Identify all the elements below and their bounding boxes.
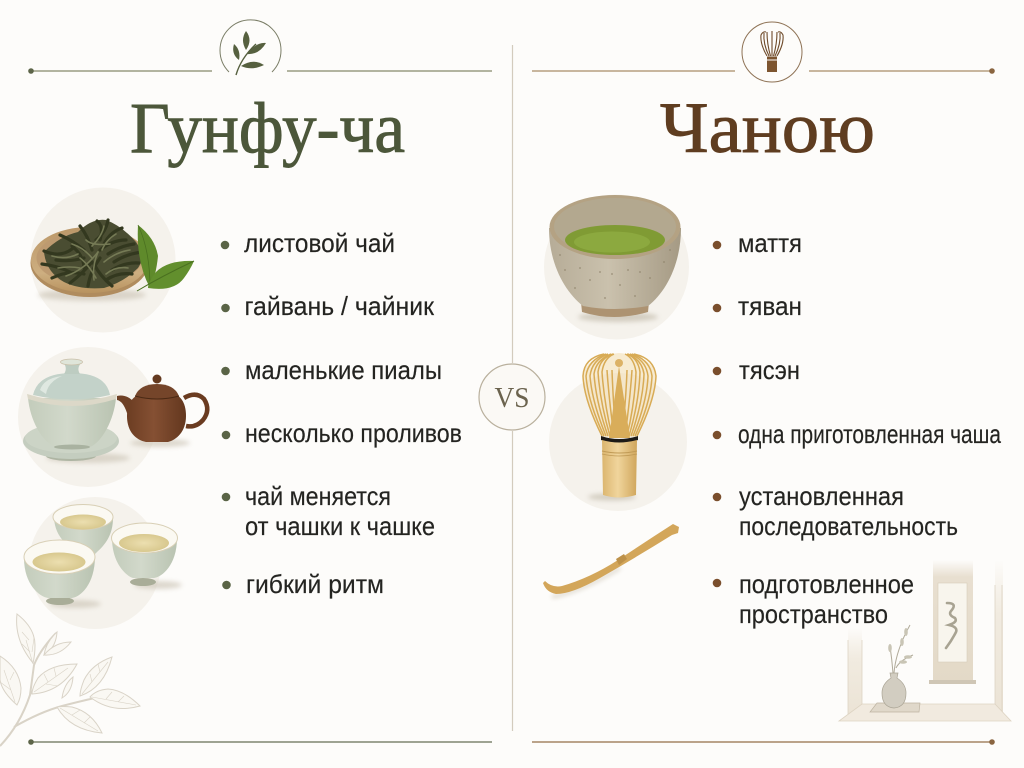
icon: bamboo whisk in circle [742, 22, 802, 82]
item: gaiwan or teapot: гайвань / чайник [244, 291, 435, 321]
item: chawan: тяван [738, 291, 802, 321]
icon: tea sprig in arc [220, 20, 281, 75]
item: matcha: маття [738, 228, 802, 258]
badge: VS: VS [494, 383, 530, 414]
item: chasen [713, 355, 800, 385]
list: chanoyu features [713, 228, 1011, 721]
illustration: pale leaf branch [0, 614, 140, 746]
image: plate of loose tea leaves [30, 188, 194, 332]
item: chawan [713, 291, 802, 321]
item: prepared space: подготовленное [739, 569, 914, 599]
item: matcha [713, 228, 802, 258]
item: several infusions: несколько проливов [245, 418, 462, 448]
item: established sequence: последовательность [739, 511, 958, 541]
panel: gongfu tea [0, 20, 492, 746]
item: prepared space: пространство [739, 599, 888, 629]
title: chanoyu: Чаною [660, 88, 875, 168]
footer rule: chanoyu [532, 739, 995, 745]
item: tea changes cup to cup: от чашки к чашке [245, 511, 435, 541]
badge: VS [479, 364, 545, 430]
header rule: chanoyu [532, 68, 995, 74]
item: loose leaf: листовой чай [244, 228, 395, 258]
image: three celadon cups of tea [24, 497, 182, 629]
image: bamboo tea whisk [549, 353, 687, 511]
image: gaiwan and clay teapot [18, 347, 207, 487]
central divider [512, 45, 514, 731]
footer rule: gongfu [28, 739, 492, 745]
image: stoneware matcha bowl [544, 194, 689, 340]
image: bamboo scoop chashaku [543, 524, 679, 597]
title: gongfu tea: Гунфу-ча [130, 88, 405, 168]
illustration: tokonoma alcove with scroll and vase [839, 560, 1011, 721]
header rule: gongfu [28, 68, 492, 74]
item: prepared space [713, 569, 914, 629]
item: flexible rhythm: гибкий ритм [246, 569, 384, 599]
panel: chanoyu [532, 22, 1011, 745]
item: small cups: маленькие пиалы [245, 355, 442, 385]
item: tea changes cup to cup: чай меняется [245, 481, 391, 511]
item: tea changes cup to cup [222, 481, 435, 541]
item: established sequence [713, 481, 958, 541]
list: gongfu features [221, 228, 462, 599]
item: established sequence: установленная [739, 481, 904, 511]
item: chasen: тясэн [739, 355, 800, 385]
